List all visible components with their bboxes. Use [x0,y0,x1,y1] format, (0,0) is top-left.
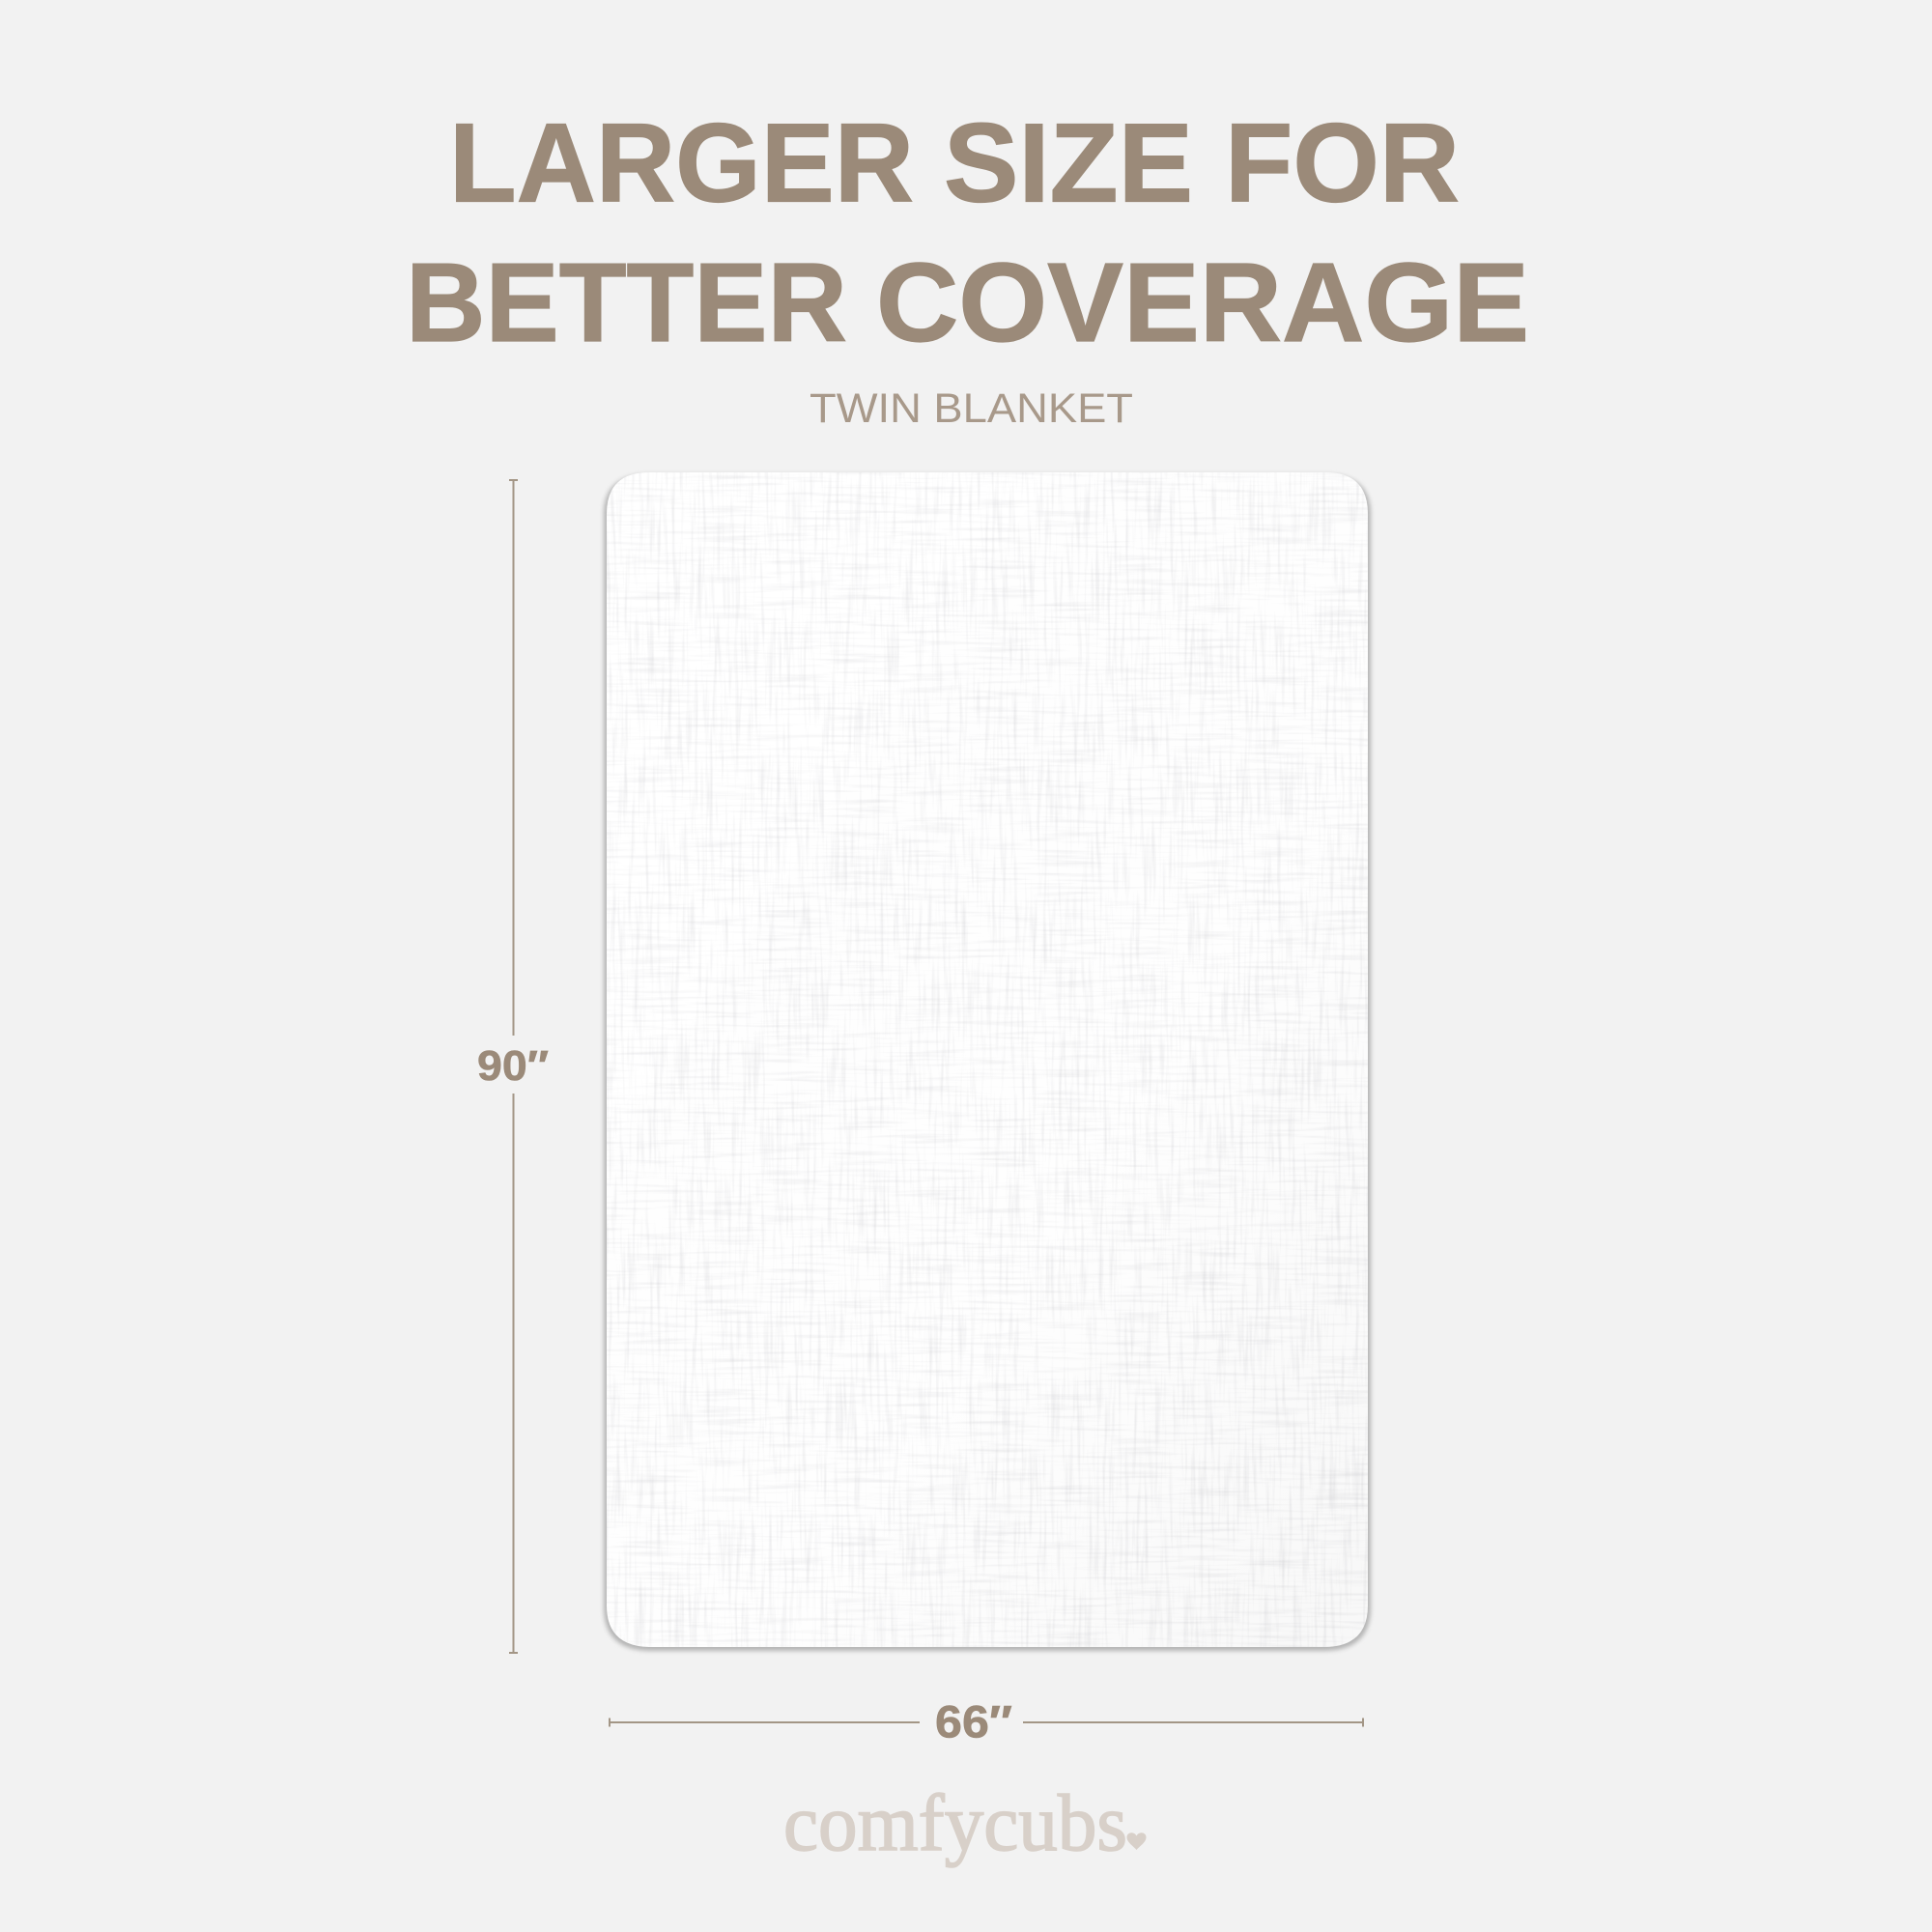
title: COVERAGE [876,240,1529,365]
logo: comfycubs: comfycubs [783,1778,1127,1868]
icon: heart [1126,1833,1146,1850]
title: BETTER [406,240,847,365]
title: FOR [1225,100,1460,226]
title: LARGER [449,100,914,226]
title [406,100,1529,365]
subtitle: twin blanket: TWIN BLANKET [810,386,1133,432]
infographic canvas [412,122,1525,1868]
blanket [599,464,1376,1654]
width dimension line: 66 inches: 66″ [935,1696,1012,1747]
title: SIZE [944,100,1193,226]
height dimension line: 90 inches: 90″ [477,1042,549,1090]
